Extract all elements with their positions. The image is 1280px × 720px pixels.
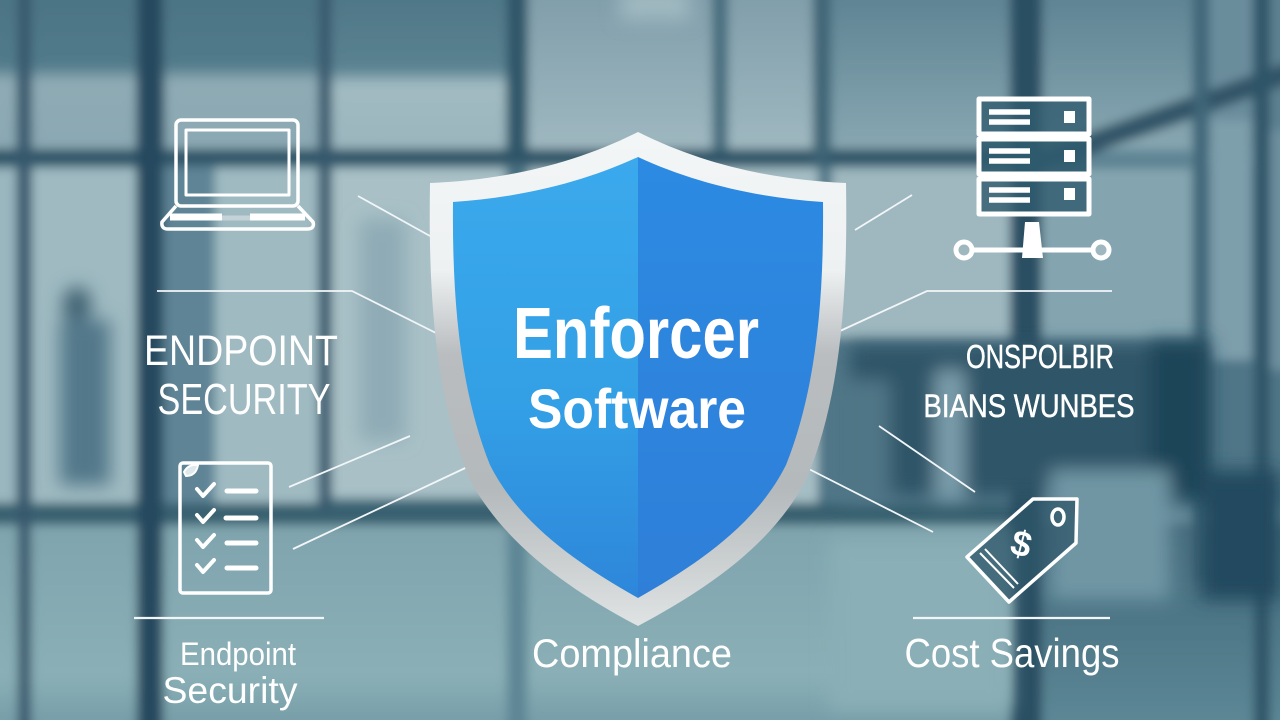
shield title: Enforcer [513,294,759,374]
label: endpoint security upper left [144,327,338,424]
icon: server stack [956,99,1109,258]
label: endpoint security lower left: Security [162,670,298,711]
blurred interior shapes [63,287,91,323]
connector lines [134,195,1112,618]
vertical mullions [18,0,31,720]
shield title: Software [528,377,746,440]
shield face left [453,157,638,598]
upper window panes [0,0,1280,150]
icon: price tag [967,499,1077,602]
label: endpoint security lower left [162,636,298,711]
shield [430,132,846,626]
label: garbled upper right: BIANS WUNBES [924,388,1134,424]
icon: laptop [162,120,313,229]
label: endpoint security upper left: SECURITY [158,375,330,424]
shield rim [430,132,846,626]
icon: checklist [180,463,271,593]
shield title [513,294,759,440]
label: endpoint security lower left: Endpoint [180,636,296,672]
label: garbled upper right: ONSPOLBIR [966,338,1114,375]
icon: price tag: $ [1006,521,1036,566]
lower window panes [0,525,1280,720]
middle window panes [0,165,1280,505]
label: garbled upper right [924,338,1134,424]
label: cost savings: Cost Savings [904,630,1120,676]
label: compliance: Compliance [532,632,732,676]
label: endpoint security upper left: ENDPOINT [144,327,338,375]
horizontal mullions [0,149,1030,165]
shield face right [638,157,823,598]
